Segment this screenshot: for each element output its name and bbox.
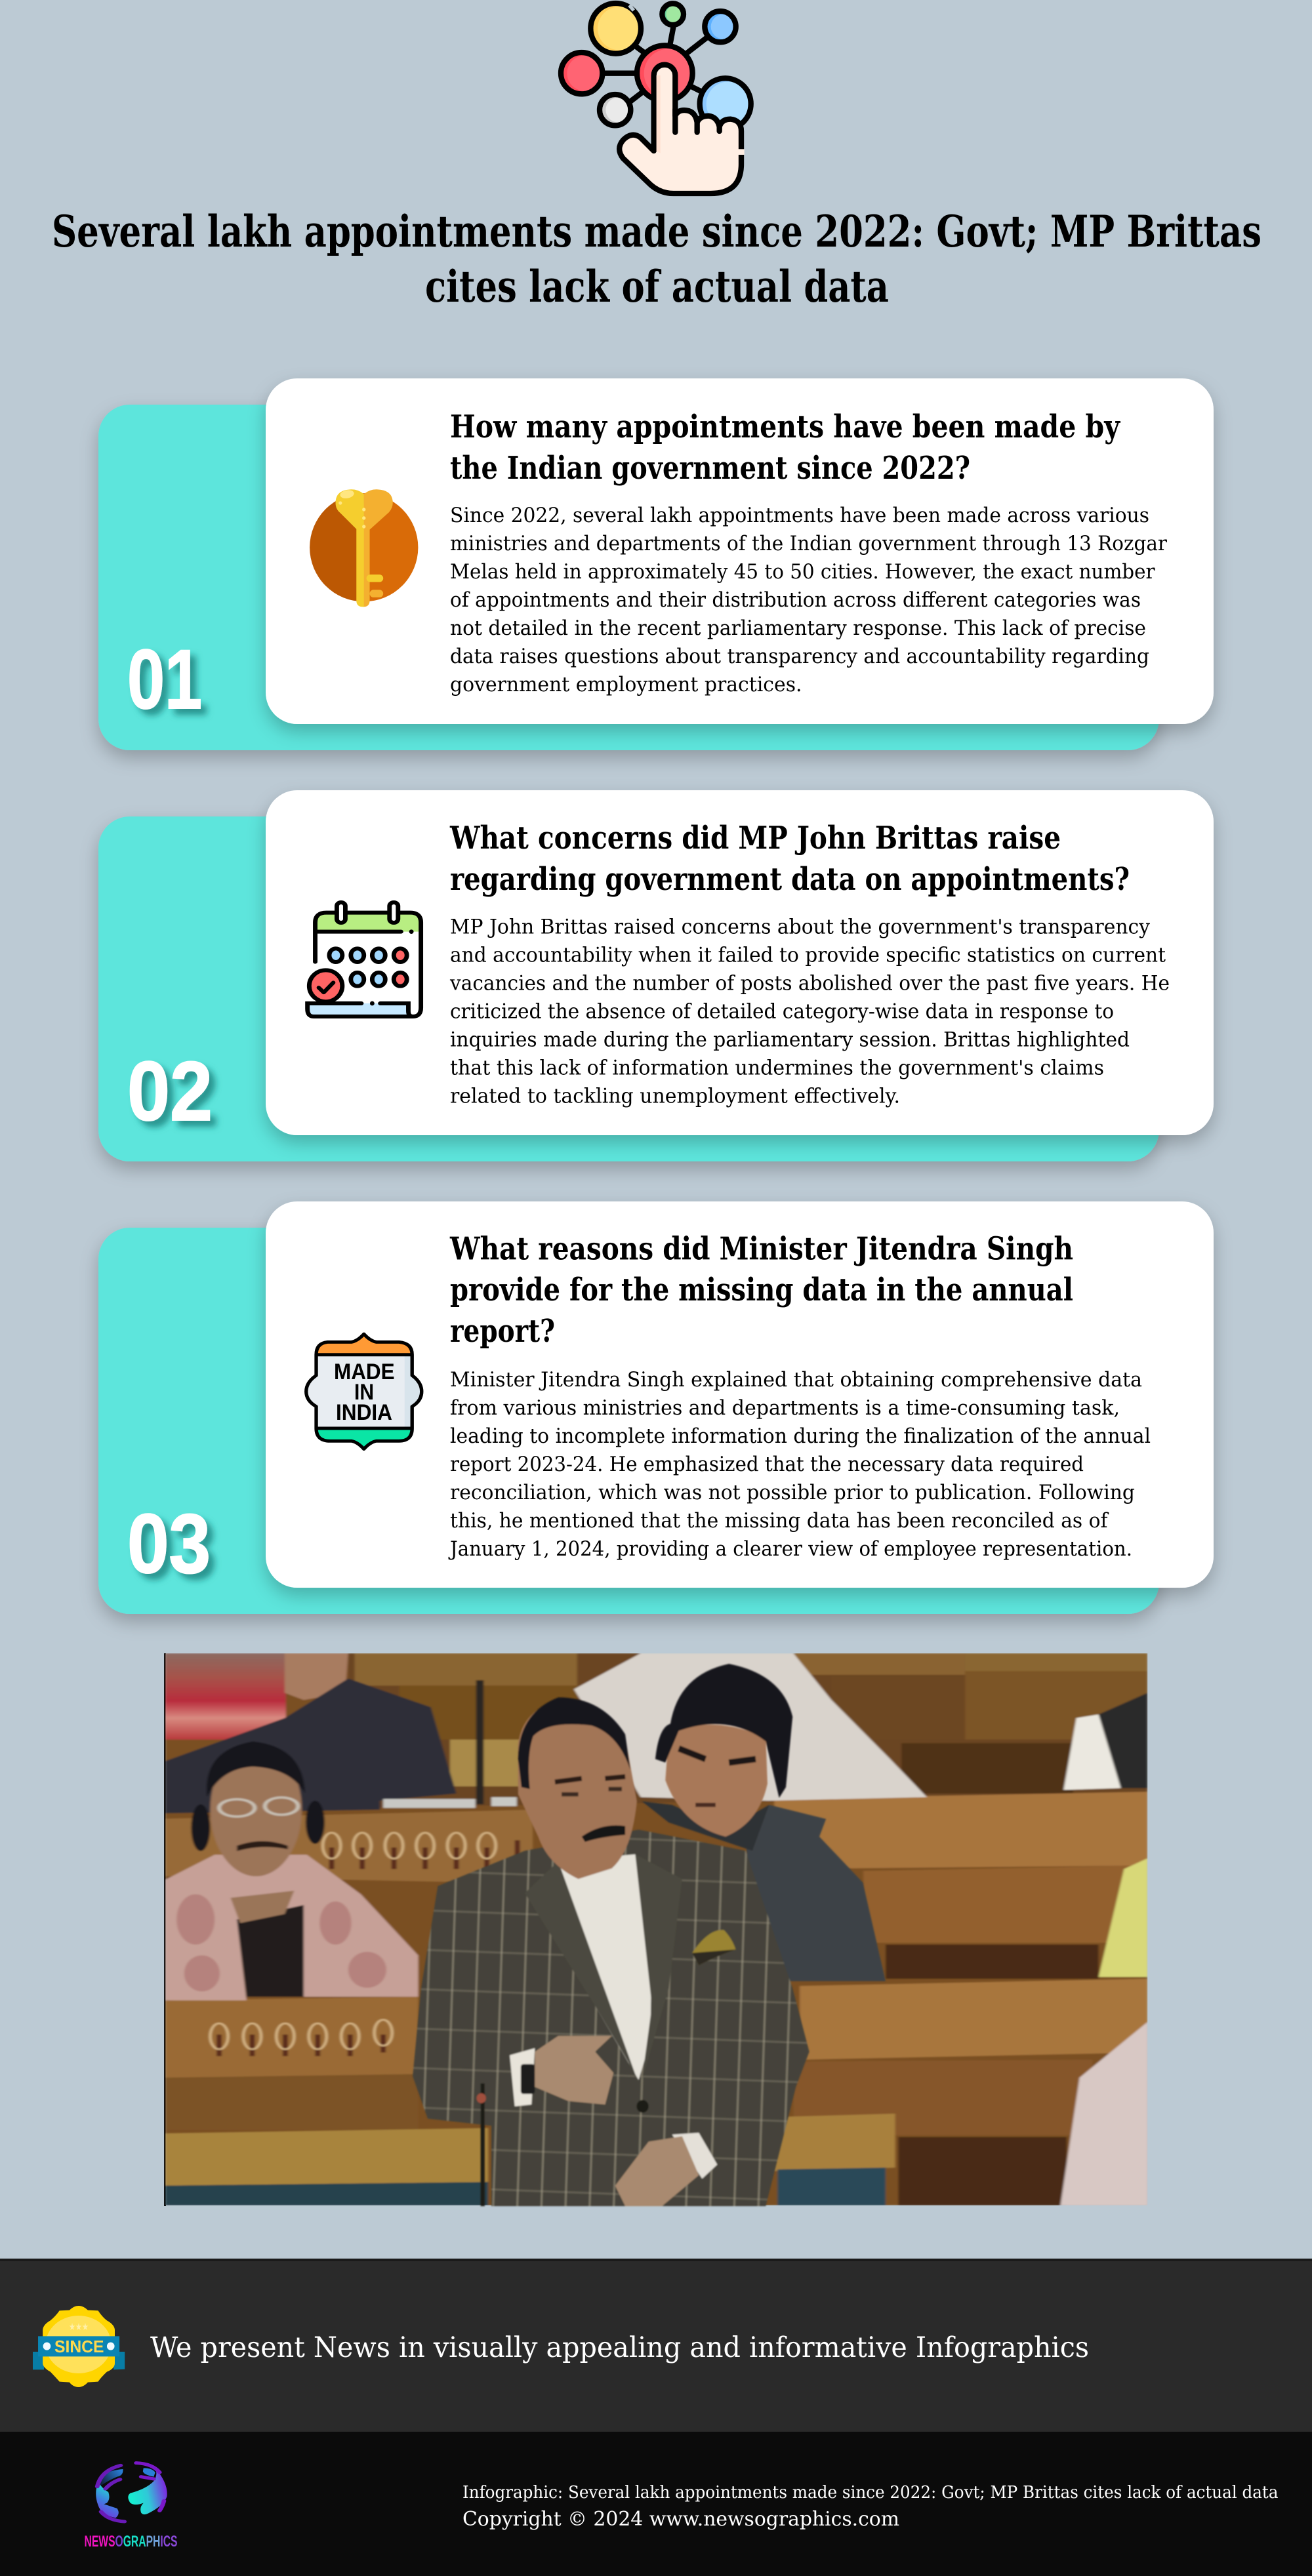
green node	[662, 3, 684, 25]
hands and cuffs	[510, 2048, 535, 2106]
yellow node	[590, 3, 641, 54]
panel: question 2	[98, 790, 1214, 1161]
title: cites lack of actual data	[425, 261, 889, 312]
teal backing card	[98, 816, 1159, 1161]
footer band: credits	[0, 2432, 1312, 2576]
answer text: inquiries made during the parliamentary session. Brittas highlighted	[450, 1028, 1130, 1052]
answer text: that this lack of information undermines the government's claims	[450, 1056, 1104, 1079]
icon: made in india badge	[306, 1334, 422, 1449]
answer text: leading to incomplete information during the finalization of the annual	[450, 1424, 1151, 1448]
number 02: 02	[127, 1045, 213, 1138]
question heading: regarding government data on appointments?	[450, 861, 1130, 898]
head	[518, 1699, 637, 1879]
question heading: How many appointments have been made by	[450, 409, 1121, 445]
large light blue node	[700, 78, 751, 129]
icon: golden key	[310, 489, 418, 607]
icon: since badge	[33, 2306, 125, 2387]
answer text: January 1, 2024, providing a clearer view of employee representation.	[448, 1537, 1132, 1561]
question heading	[449, 820, 1130, 898]
answer text	[448, 1368, 1151, 1561]
pocket square	[692, 1930, 735, 1965]
icon: calendar with check	[308, 902, 421, 1016]
answer text: from various ministries and departments is a time-consuming task,	[450, 1396, 1120, 1420]
number 03: 03	[127, 1497, 211, 1591]
source line: Infographic: Several lakh appointments made since 2022: Govt; MP Brittas cites lack of actual data	[462, 2483, 1278, 2503]
answer text: MP John Brittas raised concerns about the government's transparency	[450, 916, 1150, 939]
logo: newsographics: NEWSOGRAPHICS	[84, 2533, 177, 2550]
young man behind	[746, 1805, 886, 1981]
answer text: this, he mentioned that the missing data has been reconciled as of	[450, 1509, 1109, 1533]
white content card	[266, 1201, 1214, 1588]
grey node	[600, 94, 630, 125]
photo: minister speaking in parliament	[164, 1653, 1147, 2206]
answer text: ministries and departments of the Indian government through 13 Rozgar	[450, 532, 1167, 555]
answer text: Minister Jitendra Singh explained that obtaining comprehensive data	[450, 1368, 1142, 1392]
question heading: report?	[450, 1313, 555, 1350]
answer text: criticized the absence of detailed category-wise data in response to	[450, 999, 1114, 1023]
question heading	[449, 1230, 1073, 1350]
icon: made in india badge: IN	[354, 1380, 374, 1405]
question heading: What reasons did Minister Jitendra Singh	[449, 1230, 1073, 1267]
answer text: data raises questions about transparency and accountability regarding	[450, 645, 1149, 668]
answer text: report 2023-24. He emphasized that the necessary data required	[450, 1453, 1084, 1476]
icon: made in india badge: MADE	[334, 1359, 395, 1384]
answer text: of appointments and their distribution across different categories was	[450, 588, 1141, 612]
hand	[619, 65, 741, 193]
logo: newsographics	[84, 2463, 177, 2550]
connector lines	[605, 26, 707, 103]
white content card	[266, 378, 1214, 724]
panel: question 3	[98, 1201, 1214, 1614]
blue node	[705, 11, 736, 42]
icon: made in india badge: INDIA	[336, 1400, 392, 1425]
question heading: provide for the missing data in the annual	[450, 1272, 1073, 1308]
copyright line: Copyright © 2024 www.newsographics.com	[462, 2508, 899, 2531]
red node	[561, 52, 602, 94]
answer text	[450, 504, 1167, 696]
icon: since badge: SINCE	[54, 2337, 104, 2356]
teal backing card	[98, 405, 1159, 750]
answer text: vacancies and the number of posts abolished over the past five years. He	[449, 972, 1170, 996]
answer text: reconciliation, which was not possible prior to publication. Following	[450, 1481, 1135, 1504]
answer text: Since 2022, several lakh appointments have been made across various	[450, 504, 1149, 527]
answer text: related to tackling unemployment effectively.	[450, 1085, 900, 1108]
title	[52, 206, 1261, 312]
tagline text: We present News in visually appealing and informative Infographics	[150, 2331, 1089, 2364]
central red node	[637, 45, 693, 101]
icon: hand touching network nodes	[561, 3, 751, 193]
white content card	[266, 790, 1214, 1135]
answer text: and accountability when it failed to provide specific statistics on current	[450, 943, 1166, 967]
question heading	[450, 409, 1121, 487]
question heading: the Indian government since 2022?	[450, 450, 970, 487]
suit	[413, 1830, 810, 2206]
answer text: not detailed in the recent parliamentary response. This lack of precise	[450, 616, 1146, 640]
answer text	[449, 916, 1170, 1108]
footer band: tagline	[0, 2259, 1312, 2432]
answer text: government employment practices.	[450, 673, 802, 696]
panel: question 1	[98, 378, 1214, 750]
icon: since badge: ★★★	[69, 2321, 89, 2333]
answer text: Melas held in approximately 45 to 50 cities. However, the exact number	[450, 560, 1155, 584]
question heading: What concerns did MP John Brittas raise	[449, 820, 1061, 856]
number 01: 01	[127, 633, 202, 727]
teal backing card	[98, 1228, 1159, 1614]
